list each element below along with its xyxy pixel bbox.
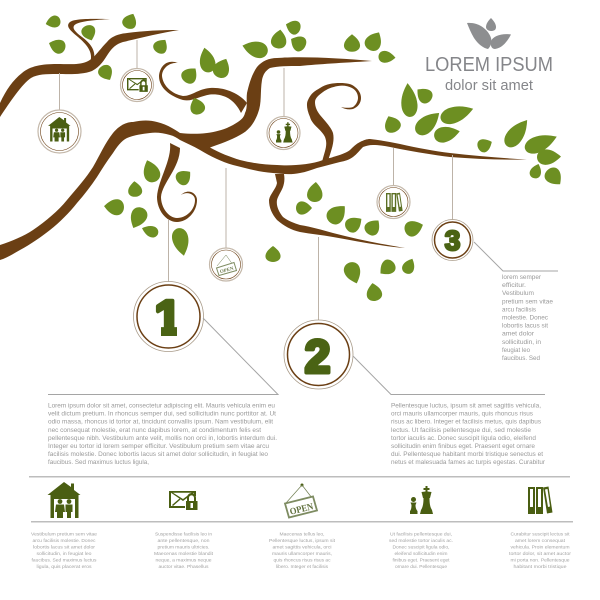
caption 1: lobortis lacus sit amet dolor — [33, 544, 95, 550]
number badge 3 — [432, 220, 473, 260]
caption 4: Ut facilisis pellentesque dui, — [390, 532, 452, 538]
text block 1: odio massa, rhoncus id tortor at, tincidunt convallis ipsum. Nam vestibulum, elit — [48, 419, 273, 426]
number badge 2 — [284, 320, 353, 389]
caption 3: mauris ullamcorper mauris, — [272, 551, 332, 557]
number badge 1 — [134, 282, 204, 352]
logo leaves — [467, 18, 511, 49]
text block 3: molestie. Donec — [502, 314, 549, 322]
icon: envelope — [169, 491, 198, 510]
text block 1: Lorem ipsum dolor sit amet, consectetur adipiscing elit. Mauris vehicula enim eu — [48, 402, 275, 410]
caption 1: faucibus. Sed maximus luctus — [32, 558, 97, 564]
caption 2 — [154, 532, 214, 570]
text block 3: pretium sem vitae — [502, 298, 553, 305]
text block 3: faucibus. Sed — [502, 355, 540, 362]
caption 1: arcu facilisis molestie. Donec — [32, 538, 96, 544]
text block 3: efficitur. — [502, 282, 526, 289]
text block 1: nec consequat molestie, erat nunc dapibus lorem, at condimentum felis est — [48, 427, 261, 434]
caption 2: pretium mauris ultricies. — [158, 544, 210, 550]
caption 2: auctor vitae. Phasellus — [158, 564, 209, 570]
number badge 1: 1 — [155, 292, 181, 345]
hanging strings — [60, 40, 452, 320]
caption 4: eleifend sollicitudin enim — [394, 551, 448, 557]
caption 3: amet sagittis vehicula, orci — [272, 544, 332, 550]
text block 2: orci mauris ullamcorper mauris, quis rhoncus risus — [391, 411, 533, 418]
branch curl: top right S — [307, 83, 361, 162]
branch curl: top-left — [68, 19, 110, 63]
text block 3: arcu facilisis — [502, 306, 536, 313]
leaves: lower left cluster — [103, 157, 281, 262]
text block 3: Vestibulum — [502, 290, 534, 297]
icon: house — [48, 482, 80, 518]
number badge 2: 2 — [305, 330, 330, 382]
text block 3 — [502, 274, 553, 362]
divider bottom — [31, 521, 573, 522]
text block 2: dui. Pellentesque habitant morbi tristique senectus et — [391, 451, 543, 458]
text block 1: velit dictum pretium. In rhoncus semper dui, sed sollicitudin nunc porttitor at. Ut — [48, 411, 276, 418]
badge: house — [38, 110, 81, 153]
text block 2: sollicitudin enim finibus eget. Praesent eget ornare — [391, 443, 535, 450]
text block 1: faucibus. Sed maximus luctus ligula, — [48, 459, 149, 466]
connector 3 — [474, 242, 558, 271]
caption 1 — [31, 532, 97, 570]
text block 3: lobortis lacus sit — [502, 323, 548, 330]
caption 5 — [509, 532, 571, 570]
branch curl: lower — [157, 143, 197, 222]
leaves: upper left cluster — [44, 11, 309, 117]
caption 5: amet lorem consequat — [515, 538, 566, 544]
text block 3: amet dolor — [502, 331, 535, 338]
branch curl: middle — [159, 62, 247, 113]
text block 1 — [48, 402, 277, 466]
caption 3 — [269, 532, 336, 570]
caption 1: sollicitudin, in feugiat leo — [36, 551, 92, 557]
caption 4: Donec suscipit ligula odio, — [392, 544, 450, 550]
caption 3: quis rhoncus risus risus ac — [274, 558, 331, 564]
caption 3: libero. Integer et facilisis — [276, 564, 329, 570]
caption 1: ligula, quis placerat eros — [36, 564, 92, 570]
subtitle: dolor sit amet — [445, 77, 534, 94]
text block 1: pellentesque nibh. Vestibulum ante velit, mollis non orci in, lobortis interdum dui. — [48, 435, 277, 442]
icon: open sign: OPEN — [289, 502, 315, 518]
icon: open sign — [285, 484, 317, 518]
badge: open sign — [210, 248, 242, 281]
connector 2 — [353, 356, 545, 394]
text block 2: risus ac libero. Integer et facilisis metus, quis dapibus — [391, 419, 541, 426]
caption 3: Maecenas tellus leo, — [280, 532, 324, 538]
caption 4: finibus eget. Praesent eget — [392, 558, 450, 564]
caption 4: sed molestie tortor iaculis ac. — [389, 538, 453, 544]
branch: lower right — [269, 174, 405, 248]
number badge 3: 3 — [445, 225, 460, 256]
branch: top-left bough — [0, 19, 179, 117]
badge: open sign: OPEN — [220, 267, 235, 275]
text block 3: lorem semper — [502, 274, 542, 281]
text block 1: Integer eu tortor id lorem semper efficitur. Vestibulum pretium sem vitae arcu — [48, 443, 269, 450]
caption 5: Curabitur suscipit lectus sit — [510, 532, 570, 538]
caption 5: habitant morbi tristique — [514, 564, 567, 570]
caption 5: vehicula. Proin elementum — [510, 544, 570, 550]
text block 2 — [391, 402, 546, 466]
text block 2: netus et malesuada fames ac turpis egestas. Curabitur — [391, 459, 546, 466]
caption 1: Vestibulum pretium sem vitae — [31, 532, 97, 538]
text block 1: facilisis molestie. Donec lobortis lacus sit amet dolor sollicitudin, in feugiat leo — [48, 451, 268, 458]
connector 1 — [48, 318, 278, 394]
leaves: upper right cluster — [344, 28, 566, 189]
text block 2: lectus. Ut facilisis pellentesque dui, sed molestie — [391, 427, 531, 434]
caption 4: ornare dui. Pellentesque — [395, 564, 447, 570]
text block 3: sollicitudin, in — [502, 339, 541, 346]
title: LOREM IPSUM — [425, 54, 553, 76]
caption 2: Suspendisse facilisis leo in — [155, 532, 212, 538]
branch: main bough — [0, 57, 527, 260]
divider top — [29, 476, 570, 478]
caption 2: ante pellentesque, non — [158, 538, 210, 544]
icon: binders — [528, 486, 552, 514]
icon: chess — [410, 486, 433, 514]
caption 2: Maecenas molestie blandit — [154, 551, 214, 557]
leaves: lower right cluster — [296, 181, 426, 302]
text block 2: Pellentesque luctus, ipsum sit amet sagittis vehicula, — [391, 402, 541, 410]
text block 2: tortor iaculis ac. Donec suscipit ligula odio, eleifend — [391, 435, 536, 442]
badge: chess — [267, 116, 300, 150]
badge: envelope — [120, 68, 154, 102]
caption 5: tortor dolor, sit amet auctor — [509, 551, 571, 557]
badge: binders — [377, 186, 410, 218]
caption 4 — [389, 532, 453, 570]
text block 3: feugiat leo — [502, 347, 530, 354]
caption 5: mi porta non. Pellentesque — [510, 558, 570, 564]
caption 2: neque, a maximus neque — [156, 558, 212, 564]
caption 3: Pellentesque luctus, ipsum sit — [269, 538, 336, 544]
